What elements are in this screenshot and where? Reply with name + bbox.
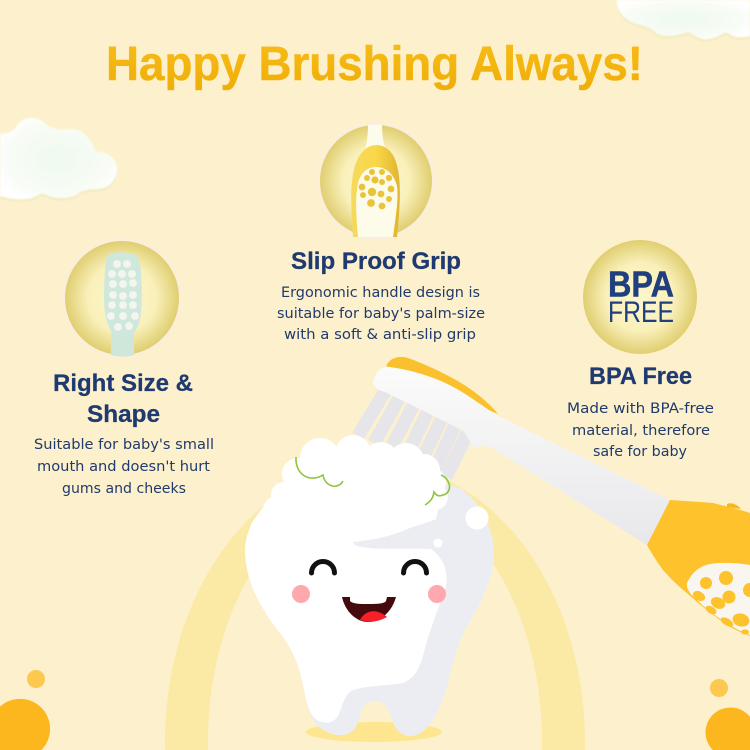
grip pad [687,563,750,635]
cloud top right [617,0,750,42]
decorative dots bottom left [0,670,50,750]
background ring arc [165,463,585,750]
text block: slip proof grip [277,248,485,343]
tooth character [245,435,494,736]
text block: right size and shape: Right Size & [53,370,193,397]
text block: right size and shape: Shape [87,401,160,428]
text block: slip proof grip: Ergonomic handle design is [281,285,480,301]
yellow grip [647,500,750,636]
icon: BPA free badge [583,240,697,354]
text block: BPA free: BPA Free [589,363,692,390]
bristles [358,388,468,477]
text block: BPA free [567,363,714,460]
white handle [373,367,670,545]
text block: slip proof grip: Slip Proof Grip [291,248,461,275]
text block: right size and shape: gums and cheeks [62,481,186,497]
text block: BPA free: material, therefore [572,423,710,439]
icon: right size brush [62,238,182,358]
text block: right size and shape: Suitable for baby's small [34,437,214,453]
text block: BPA free: safe for baby [593,444,687,460]
cheeks [292,585,310,603]
icon: BPA free badge: FREE [608,296,674,329]
text block: right size and shape [34,370,214,497]
foam [250,435,448,600]
icon: slip proof grip brush [317,122,435,240]
toothbrush [358,357,750,636]
text block: right size and shape: mouth and doesn't hurt [37,459,210,475]
text block: slip proof grip: suitable for baby's palm-size [277,306,485,322]
tooth shadow [306,722,442,742]
mouth [342,597,396,622]
text block: slip proof grip: with a soft & anti-slip grip [284,327,476,343]
text block: BPA free: Made with BPA-free [567,401,714,417]
yellow back of head [386,357,498,414]
cloud left [0,118,117,202]
eyes [312,562,334,573]
decorative dots bottom right [706,679,750,750]
tooth body [245,475,494,736]
grip dots [691,571,750,634]
bubbles [466,506,488,530]
grey band [353,518,450,549]
icon: BPA free badge: BPA [608,264,674,304]
title: Happy Brushing Always! [106,38,643,91]
white highlight [245,470,447,723]
